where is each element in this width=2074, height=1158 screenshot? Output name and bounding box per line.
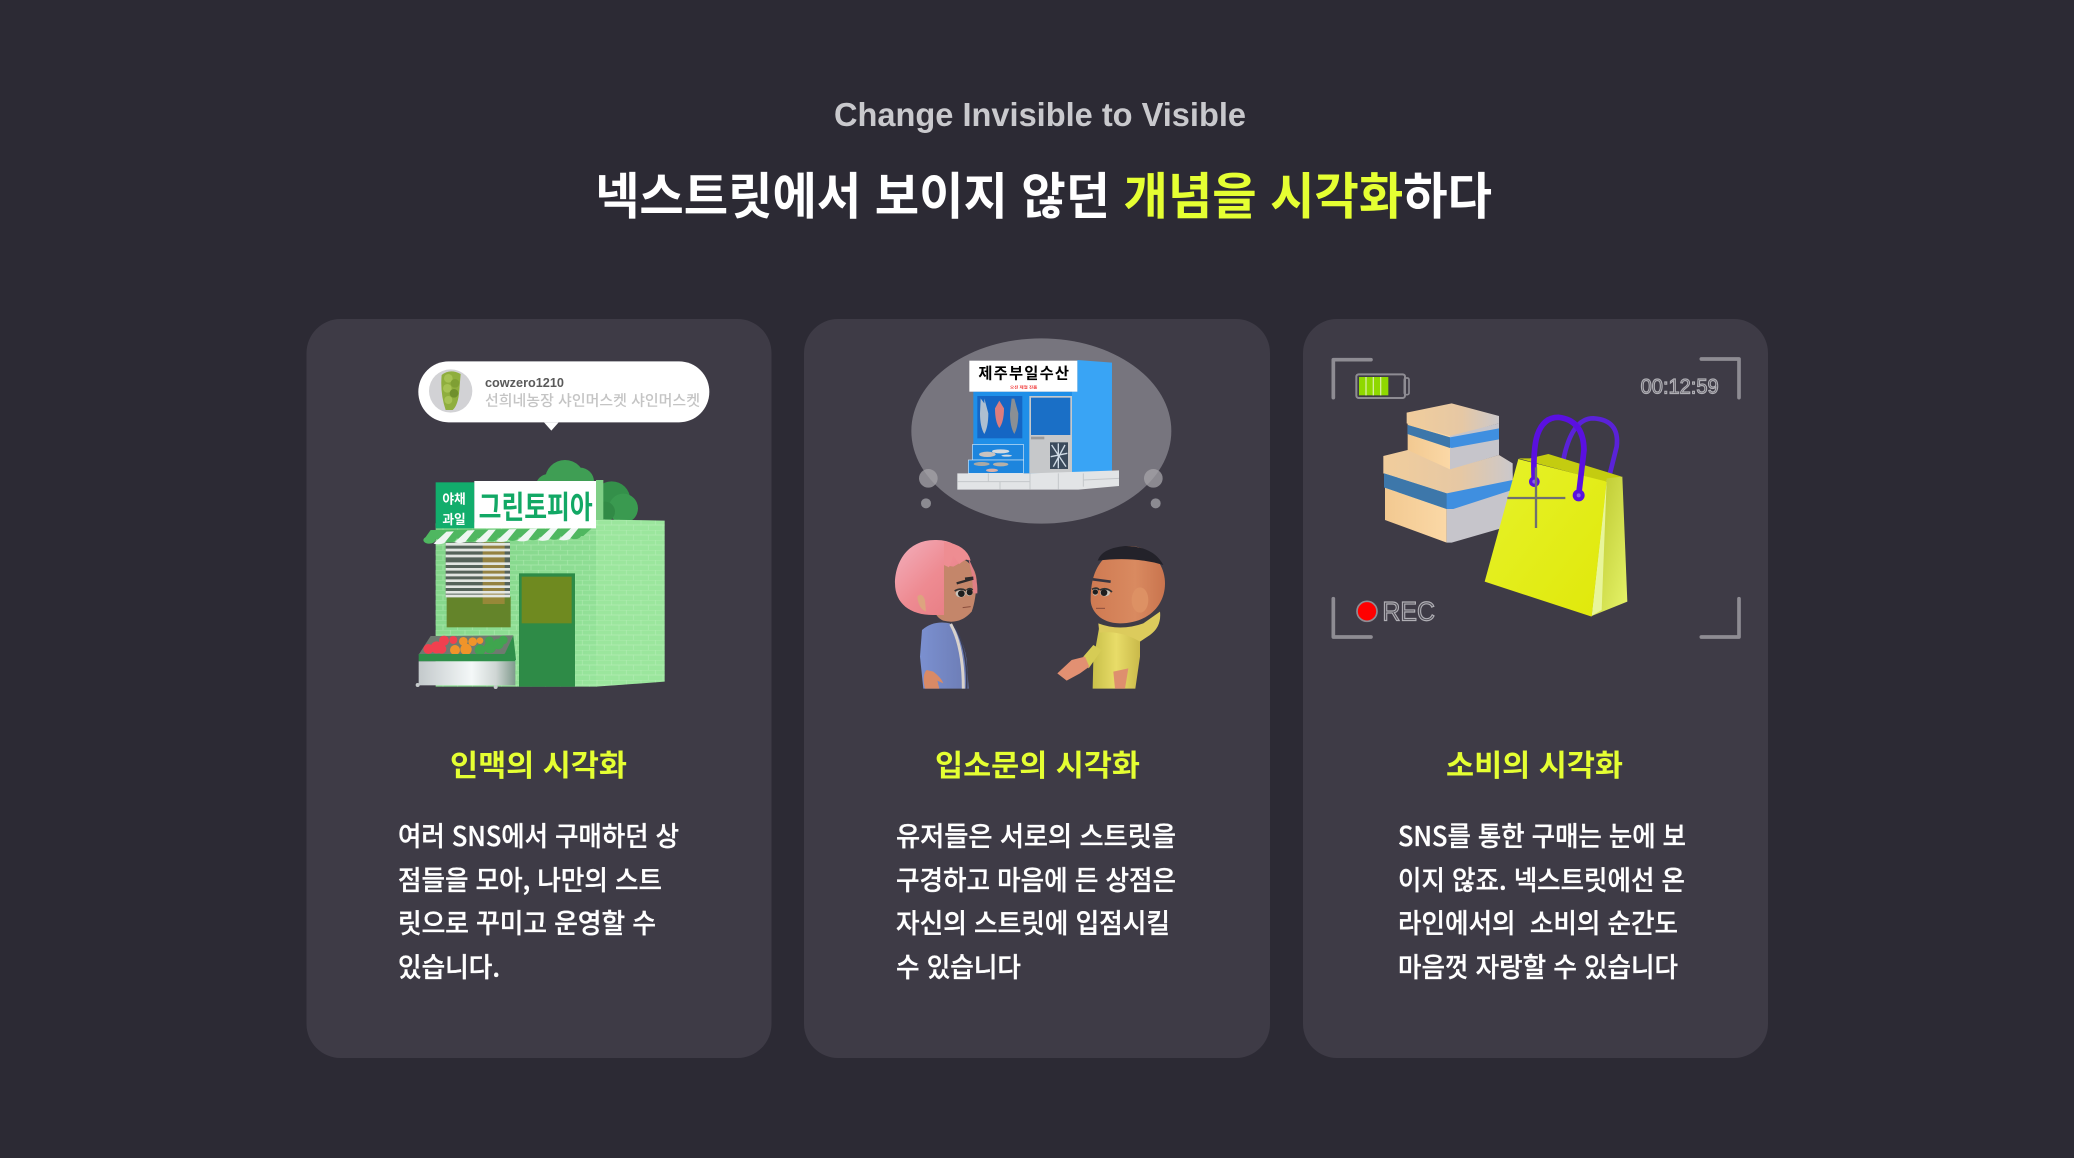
description: 인맥: 있습니다.	[398, 946, 500, 985]
thought bubble	[911, 338, 1171, 524]
description: 소비	[1398, 815, 1686, 985]
panel: 소비의 시각화	[1303, 319, 1768, 1058]
heading: 소비의 시각화: 소비의 시각화	[1446, 741, 1623, 785]
sign: 야채	[442, 488, 466, 507]
description: 소비: 라인에서의 소비의 순간도	[1398, 902, 1678, 941]
REC indicator: REC	[1382, 596, 1435, 626]
description: 소비: 이지 않죠. 넥스트릿에선 온	[1398, 859, 1685, 898]
description: 입소문	[896, 815, 1176, 985]
sign: 그린토피아	[479, 483, 593, 528]
description: 인맥: 릿으로 꾸미고 운영할 수	[398, 902, 656, 941]
panel: 입소문의 시각화	[804, 319, 1270, 1058]
blue seafood store: 오션 제철 진품	[1010, 385, 1038, 391]
sign: 과일	[442, 509, 466, 528]
heading: 인맥의 시각화: 인맥의 시각화	[450, 741, 627, 785]
description: 입소문: 구경하고 마음에 든 상점은	[896, 859, 1176, 898]
speech bubble: 선희네농장 샤인머스켓 샤인머스켓	[485, 389, 700, 410]
description: 소비: 마음껏 자랑할 수 있습니다	[1398, 946, 1678, 985]
sign	[436, 480, 603, 528]
description: 소비: SNS를 통한 구매는 눈에 보	[1398, 815, 1686, 854]
title: 넥스트릿에서 보이지 않던 개념을 시각화하다	[595, 157, 1492, 229]
speech bubble: cowzero1210	[485, 376, 564, 390]
eyebrow: Change Invisible to Visible: Change Invisible to Visible	[834, 96, 1246, 133]
viewfinder corners	[1333, 359, 1739, 637]
timer: 00:12:59	[1641, 374, 1719, 398]
speech bubble	[418, 361, 709, 431]
battery	[1356, 374, 1409, 398]
illustration: green grocery store with speech bubble	[416, 361, 709, 689]
blue seafood store: 제주부일수산	[978, 362, 1069, 384]
description: 입소문: 유저들은 서로의 스트릿을	[896, 815, 1176, 854]
character: pink-haired woman	[895, 540, 977, 689]
awning	[423, 527, 592, 545]
description: 입소문: 수 있습니다	[896, 946, 1021, 985]
blue seafood store	[957, 360, 1119, 490]
description: 입소문: 자신의 스트릿에 입점시킬	[896, 902, 1170, 941]
store walls	[436, 519, 597, 687]
shopping bag	[1485, 417, 1627, 617]
description: 인맥: 여러 SNS에서 구매하던 상	[398, 815, 679, 854]
description: 인맥: 점들을 모아, 나만의 스트	[398, 859, 662, 898]
tree	[536, 460, 638, 523]
heading: 입소문의 시각화: 입소문의 시각화	[935, 741, 1140, 785]
character: man in yellow hoodie	[1057, 546, 1165, 689]
illustration: two characters imagining a store	[895, 338, 1171, 689]
boxes	[1383, 403, 1513, 543]
description: 인맥	[398, 815, 679, 985]
crosshair	[1507, 467, 1565, 528]
fruit stand	[416, 635, 516, 689]
store door	[519, 573, 575, 687]
illustration: camera viewfinder with boxes and shopping bag	[1333, 359, 1739, 637]
REC indicator	[1357, 596, 1435, 626]
panel: 인맥의 시각화	[306, 319, 772, 1058]
store window and blinds	[446, 542, 511, 627]
